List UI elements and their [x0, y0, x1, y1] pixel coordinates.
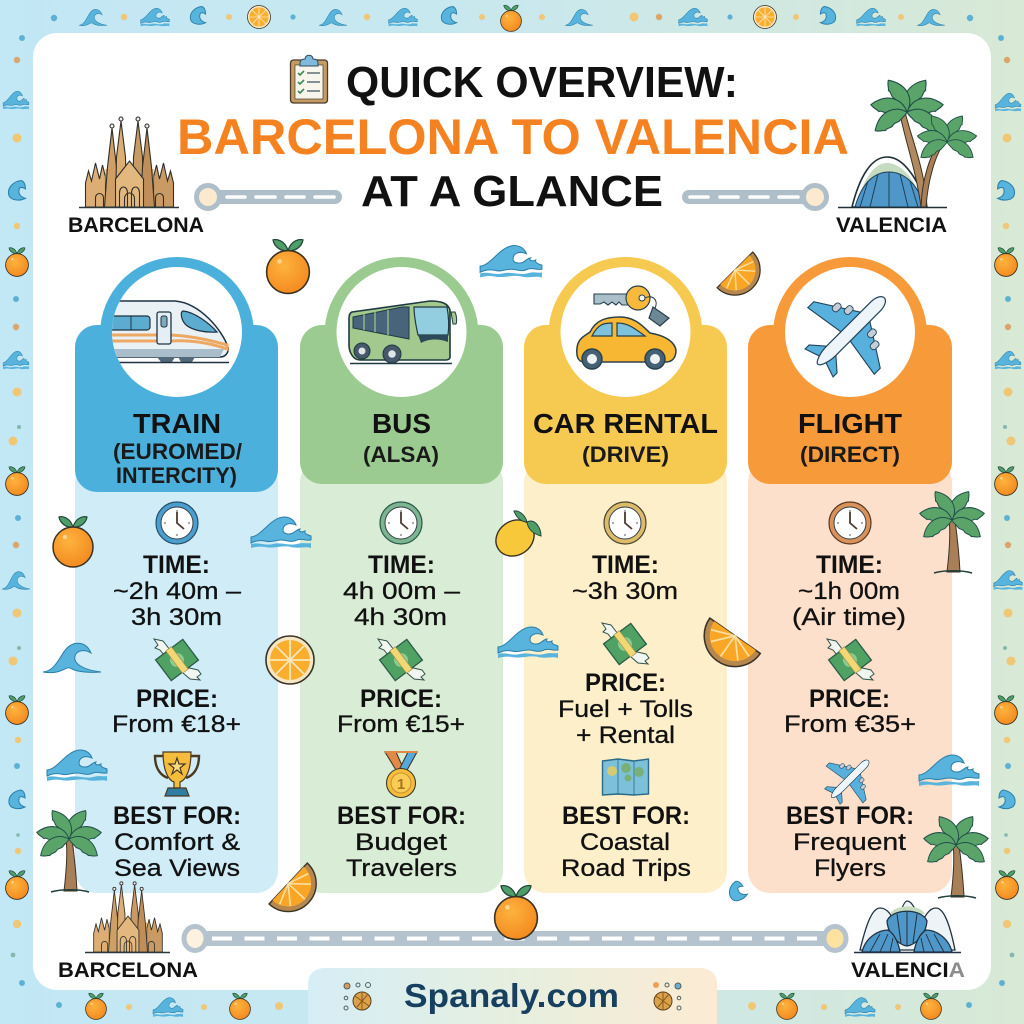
icon: map: [602, 759, 648, 795]
icon: orange slice middle: [692, 618, 760, 679]
train subheading: (EUROMED/: [113, 439, 242, 464]
title line 1: QUICK OVERVIEW:: [346, 58, 738, 107]
bus time: 4h 00m –: [343, 578, 461, 605]
car best for: [561, 759, 691, 882]
flight best for: [786, 742, 914, 882]
train price: [112, 639, 241, 738]
icon: palm left lower: [36, 808, 102, 892]
train heading: TRAIN: [133, 408, 221, 439]
decorative border: top row: [51, 5, 973, 31]
bus price: PRICE:: [360, 685, 442, 713]
decorative border: right column: [994, 35, 1022, 986]
panel: flight: [748, 257, 952, 893]
bus best for: Budget: [355, 829, 447, 856]
icon: orange slice bottom: [269, 863, 328, 923]
flight price: [784, 639, 916, 738]
route road bottom: [184, 926, 846, 950]
footer badge: [308, 968, 717, 1024]
car best for: BEST FOR:: [562, 802, 690, 830]
train best for: [113, 752, 241, 882]
car price: PRICE:: [585, 669, 666, 697]
road connector left: [196, 186, 342, 208]
car best for: Road Trips: [561, 855, 691, 882]
train time: TIME:: [143, 551, 210, 579]
flight price: PRICE:: [809, 685, 890, 713]
footer brand: Spanaly.com: [404, 977, 619, 1014]
title line 2: BARCELONA TO VALENCIA: [177, 109, 849, 165]
car price: [558, 623, 693, 749]
train subheading: INTERCITY): [116, 463, 237, 488]
decorative border: bottom row: [56, 993, 972, 1019]
icon: orange top: [267, 240, 309, 293]
icon: trophy: [155, 752, 199, 796]
car card body: [524, 460, 727, 893]
flight best for: Flyers: [814, 855, 886, 882]
panel: car rental: [524, 257, 727, 893]
label: Valencia: VALENCIA: [836, 214, 947, 237]
bus time: TIME:: [368, 551, 435, 579]
flight time: TIME:: [816, 551, 883, 579]
train time: ~2h 40m –: [113, 578, 242, 605]
bus best for: BEST FOR:: [337, 802, 466, 830]
bus price: From €15+: [337, 711, 465, 738]
icon: wave between train and bus: [251, 517, 311, 548]
car subheading: (DRIVE): [582, 442, 669, 467]
panel: train: [75, 257, 278, 893]
icon: small airplane: [813, 742, 887, 816]
car time: [572, 502, 678, 605]
train card body: [75, 460, 278, 893]
label: Valencia bottom: VALENCI A: [851, 959, 965, 982]
flight card header: [748, 257, 952, 484]
icon: wave between bus and car: [498, 627, 558, 658]
icon: wave top: [480, 246, 542, 277]
bus card body: [300, 460, 503, 893]
title line 3: AT A GLANCE: [361, 167, 663, 216]
bus best for: [337, 752, 466, 882]
icon: orange left: [53, 517, 93, 567]
bus best for: 1: [397, 776, 405, 793]
bus price: [337, 639, 465, 738]
train price: PRICE:: [136, 685, 218, 713]
title: [177, 55, 849, 216]
car price: + Rental: [576, 722, 675, 749]
panel: bus: [300, 257, 503, 893]
bus time: [343, 502, 461, 631]
car time: ~3h 30m: [572, 578, 678, 605]
scattered decorations: [36, 240, 989, 923]
train subheading: [113, 439, 242, 488]
icon: orange on road: [495, 886, 537, 939]
icon: wave right lower: [919, 755, 979, 786]
bus subheading: (ALSA): [363, 442, 439, 467]
footer icon left: [344, 982, 371, 1010]
road connector right: [682, 186, 826, 208]
car card header: [524, 257, 727, 484]
icon: train: [100, 267, 242, 397]
flight time: [792, 502, 906, 631]
icon: wave left lower: [47, 750, 107, 781]
flight subheading: (DIRECT): [800, 442, 900, 467]
train price: From €18+: [112, 711, 241, 738]
icon: palm right: [919, 489, 985, 573]
flight heading: FLIGHT: [798, 408, 902, 439]
car heading: CAR RENTAL: [533, 408, 718, 439]
car best for: Coastal: [580, 829, 670, 856]
bus heading: BUS: [372, 408, 431, 439]
flight card body: [748, 460, 952, 893]
train best for: Sea Views: [114, 855, 240, 882]
landmark: Valencia bottom: [854, 901, 961, 952]
icon: airplane: [785, 265, 917, 397]
icon: orange round slice: [266, 636, 314, 684]
icon: car and key: [560, 267, 690, 397]
flight best for: Frequent: [793, 829, 906, 856]
car price: Fuel + Tolls: [558, 696, 693, 723]
flight time: ~1h 00m: [798, 578, 900, 605]
label: Barcelona: BARCELONA: [68, 214, 204, 237]
decorative border: left column: [2, 35, 30, 986]
flight time: (Air time): [792, 604, 906, 631]
icon: curl wave left: [43, 643, 101, 673]
train time: [113, 502, 242, 631]
icon: droplet: [725, 879, 748, 904]
landmark: Valencia arts dome with palms: [838, 77, 977, 208]
landmark: Barcelona bottom: [85, 882, 170, 952]
bus card header: [300, 257, 503, 484]
icon: medal: [385, 752, 417, 798]
bus time: 4h 30m: [354, 604, 447, 631]
train best for: BEST FOR:: [113, 802, 241, 830]
train time: 3h 30m: [131, 604, 222, 631]
bus best for: Travelers: [346, 855, 457, 882]
icon: lemon: [489, 511, 541, 563]
train card header: [75, 257, 278, 492]
icon: clipboard checklist: [290, 55, 328, 103]
car time: TIME:: [592, 551, 659, 579]
icon: orange slice top: [717, 252, 771, 306]
flight best for: BEST FOR:: [786, 802, 914, 830]
landmark: Barcelona Sagrada Familia: [79, 117, 179, 208]
icon: palm right lower: [923, 814, 989, 898]
icon: bus: [336, 267, 466, 397]
label: Barcelona bottom: BARCELONA: [58, 959, 198, 982]
footer icon right: [653, 982, 681, 1010]
train best for: Comfort &: [114, 829, 240, 856]
flight price: From €35+: [784, 711, 916, 738]
